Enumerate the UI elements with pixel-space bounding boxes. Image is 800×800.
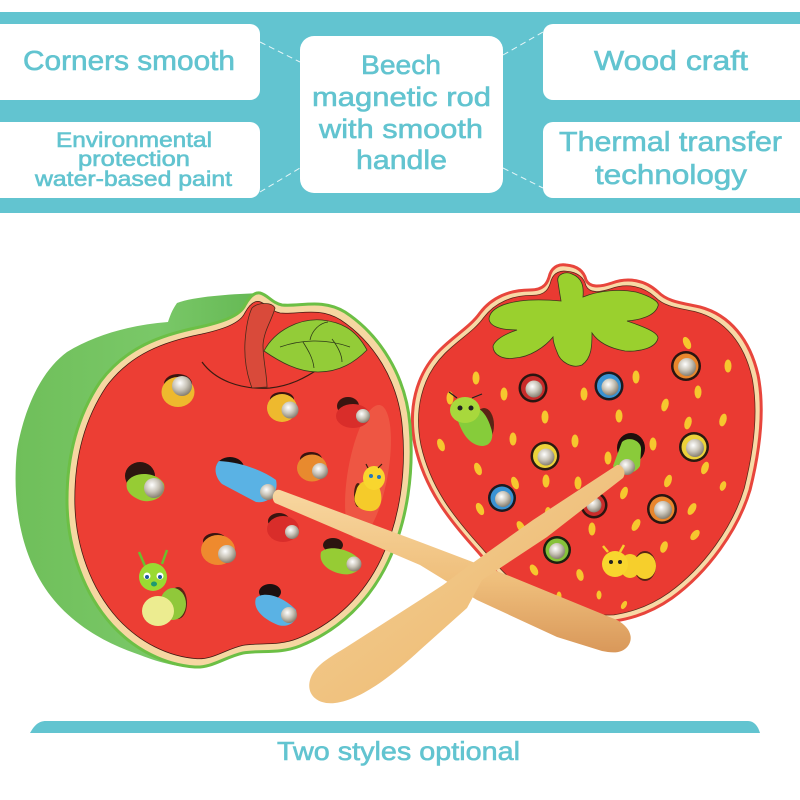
panel: environmental protection: water-based paint [34, 168, 232, 191]
apple green caterpillar [139, 550, 187, 626]
strawberry seeds [435, 336, 732, 610]
background band [0, 12, 800, 213]
strawberry yellow caterpillar [602, 545, 656, 581]
panel: corners smooth: Corners smooth [23, 45, 235, 76]
magnetic rod: apple rod [273, 490, 631, 652]
footer bar [30, 721, 760, 733]
magnetic rod: strawberry rod [309, 465, 624, 703]
apple orange worm lower [201, 533, 236, 565]
strawberry toy [412, 265, 761, 621]
panel: thermal transfer: technology [595, 159, 747, 190]
panel: environmental protection: protection [78, 148, 190, 171]
apple yellow worm 2 [267, 392, 298, 422]
panel: beech magnetic rod: with smooth [318, 114, 483, 144]
panel: corners smooth [0, 24, 260, 100]
apple blue worm lower [255, 584, 297, 626]
apple stem [245, 304, 275, 388]
apple yellow caterpillar [354, 464, 385, 511]
apple green body [16, 293, 300, 668]
apple yellow worm 1 [162, 374, 194, 407]
dashed connector lines [260, 32, 543, 192]
apple toy [16, 293, 411, 668]
footer caption: Two styles optional [277, 736, 520, 766]
apple red worm lower [267, 513, 299, 542]
panel: thermal transfer: Thermal transfer [559, 126, 782, 157]
apple glare [336, 402, 400, 542]
panel: environmental protection [0, 122, 260, 198]
apple green worm left [125, 462, 164, 501]
panel: wood craft: Wood craft [594, 45, 748, 76]
apple face [67, 293, 411, 667]
strawberry leaf [489, 273, 658, 366]
panel: wood craft [543, 24, 800, 100]
panel: thermal transfer [543, 122, 800, 198]
apple red worm top [336, 397, 370, 428]
strawberry holes with pegs [488, 351, 709, 564]
panel: beech magnetic rod [300, 36, 503, 193]
strawberry green caterpillar [449, 392, 494, 446]
apple green worm right [321, 538, 362, 574]
apple leaf [264, 320, 367, 372]
panel: environmental protection: Environmental [56, 129, 212, 152]
apple orange worm middle [297, 452, 328, 482]
apple blue worm with rod [216, 457, 277, 502]
panel: beech magnetic rod: Beech [361, 50, 441, 80]
strawberry worm on rod [613, 433, 645, 475]
panel: beech magnetic rod: magnetic rod [312, 82, 491, 112]
panel: beech magnetic rod: handle [356, 145, 447, 175]
